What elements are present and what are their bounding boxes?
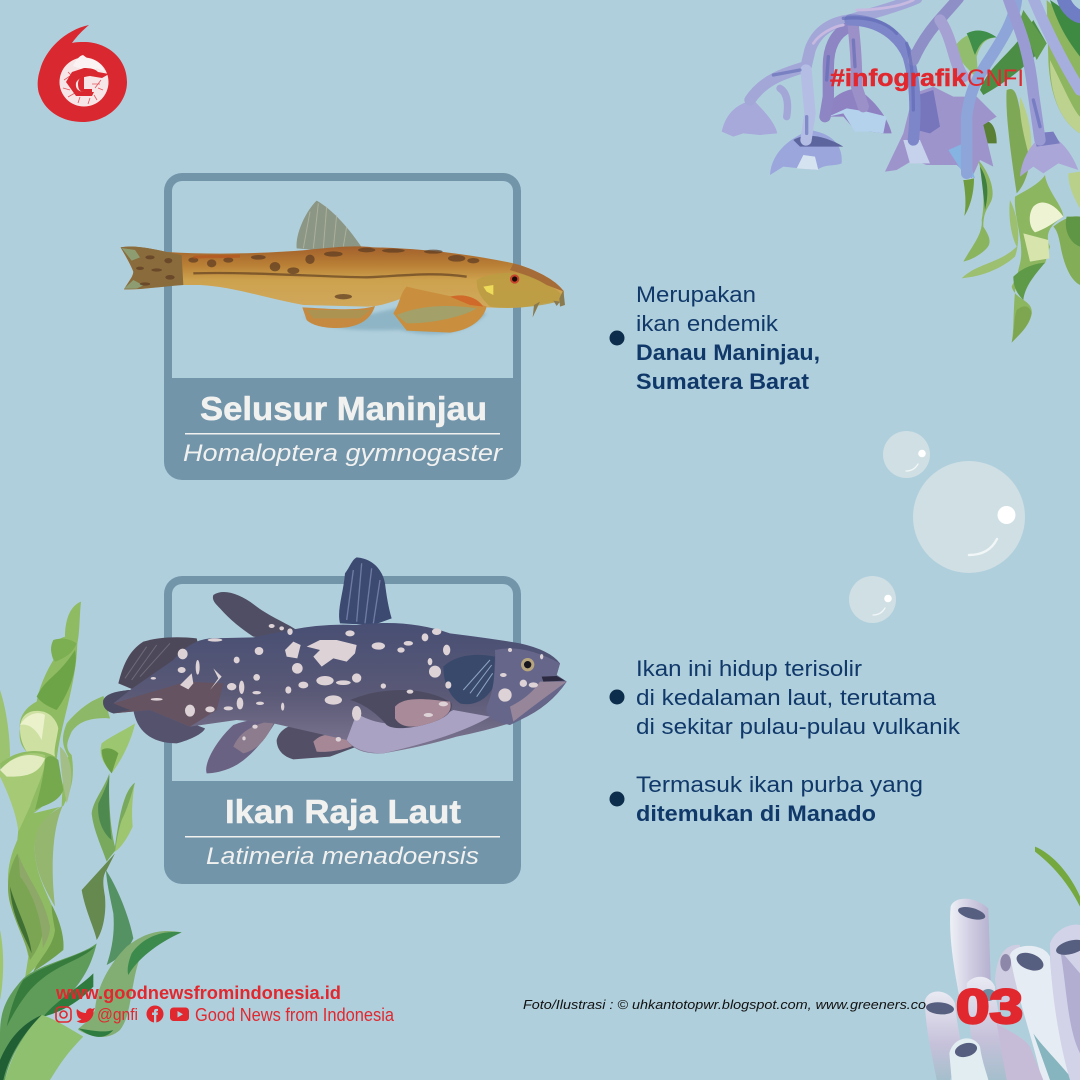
footer: website and social handles: www.goodnewsfromindonesia.id (55, 983, 341, 1003)
illustration: Ikan Raja Laut fish (103, 557, 567, 773)
illustration: green seaweed top right (955, 0, 1080, 343)
photo credit: Foto/Ilustrasi : © uhkantotopwr.blogspot.com, www.greeners.co (523, 997, 926, 1012)
icon: facebook (146, 1006, 164, 1023)
bullet text: discovery (610, 772, 923, 826)
panel: Ikan Raja Laut (164, 576, 521, 884)
hashtag: #infografik (830, 65, 967, 92)
bullet marker (610, 792, 624, 806)
bullet marker (610, 690, 624, 704)
bullet text: Selusur Maninjau: Danau Maninjau, (636, 340, 820, 365)
logo (38, 25, 127, 122)
bullet text: habitat: di kedalaman laut, terutama (636, 685, 937, 710)
panel: Selusur Maninjau (164, 173, 521, 480)
hashtag (830, 65, 1024, 92)
bullet text: habitat: Ikan ini hidup terisolir (636, 656, 862, 681)
page number: 03 (956, 981, 1023, 1034)
bubble: small top (883, 431, 930, 478)
illustration: coral tubes bottom right (925, 847, 1080, 1080)
footer: website and social handles: Good News from Indonesia (195, 1005, 395, 1025)
bullet marker (610, 330, 624, 346)
bullet text: Selusur Maninjau: Merupakan (636, 282, 756, 307)
latin name: Latimeria menadoensis (206, 843, 479, 870)
icon: instagram (56, 1007, 71, 1022)
bullet text: Selusur Maninjau: ikan endemik (636, 311, 779, 336)
bubble: large (913, 461, 1025, 573)
hashtag: GNFI (967, 65, 1024, 92)
icon: twitter (76, 1008, 95, 1023)
heading: Ikan Raja Laut: Ikan Raja Laut (225, 793, 461, 830)
illustration: Selusur Maninjau fish (121, 201, 565, 334)
icon: youtube (170, 1008, 189, 1021)
logo emblem: eagle ring (60, 55, 109, 106)
heading: Selusur Maninjau: Selusur Maninjau (200, 390, 487, 427)
illustration: purple coral branches top right (722, 0, 1080, 178)
footer: website and social handles (55, 983, 395, 1025)
illustration: green seaweed bottom left (0, 602, 182, 1080)
footer: website and social handles: @gnfi (97, 1005, 138, 1024)
latin name: Homaloptera gymnogaster (183, 440, 503, 467)
bullet text: Selusur Maninjau: Sumatera Barat (636, 369, 810, 394)
bullet text: habitat (610, 656, 961, 739)
bullet text: discovery: Termasuk ikan purba yang (636, 772, 923, 797)
bullet text: discovery: ditemukan di Manado (636, 801, 876, 826)
bubble: small bottom (849, 576, 896, 623)
bullet text: habitat: di sekitar pulau-pulau vulkanik (636, 714, 961, 739)
bullet text: Selusur Maninjau (610, 282, 820, 394)
